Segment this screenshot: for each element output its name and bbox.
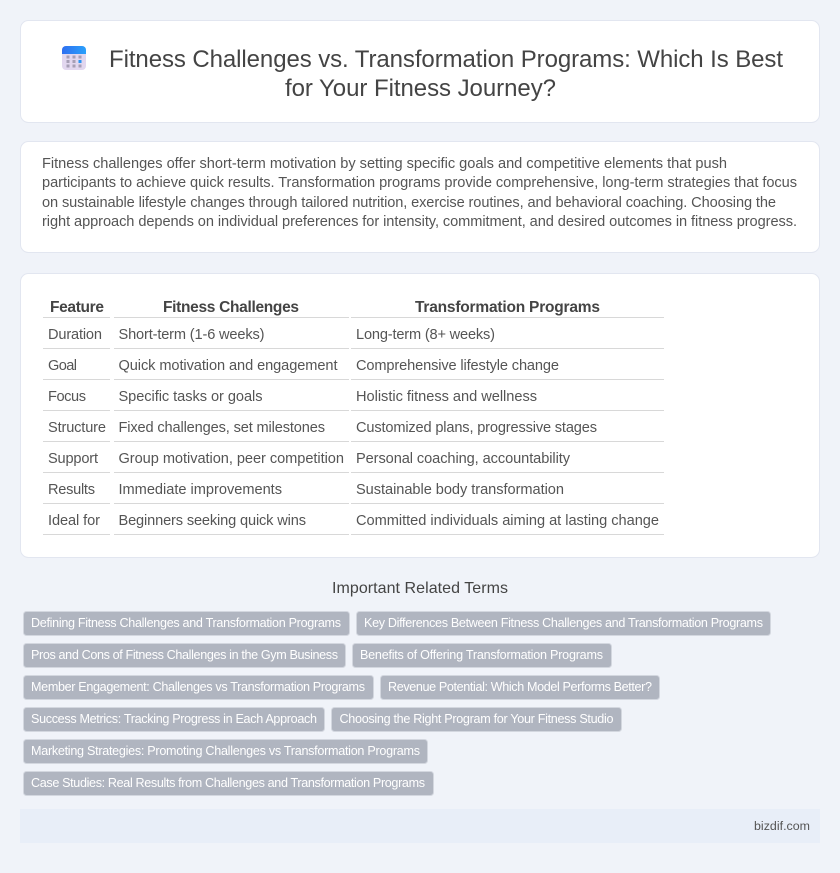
footer — [20, 809, 820, 843]
row: ideal for: Ideal for — [48, 513, 100, 529]
tag: pros and cons — [24, 644, 346, 668]
panel: comparison table — [20, 274, 820, 558]
tag: marketing strategies — [24, 740, 428, 764]
row: ideal for — [48, 513, 659, 529]
row: support: Group motivation, peer competition — [118, 451, 344, 467]
tag: benefits — [352, 644, 612, 668]
row: support — [48, 451, 571, 467]
row: focus: Holistic fitness and wellness — [356, 389, 537, 405]
row: results: Immediate improvements — [118, 482, 282, 498]
title: Fitness Challenges vs. Transformation Programs: Which Is Best — [109, 46, 783, 73]
panel: intro text — [20, 142, 820, 252]
tag: defining — [24, 612, 350, 636]
row: duration: Short-term (1-6 weeks) — [118, 327, 264, 343]
tag: key differences — [356, 612, 770, 636]
row: structure: Fixed challenges, set milestones — [118, 420, 325, 436]
row: focus: Specific tasks or goals — [118, 389, 262, 405]
row: results: Results — [48, 482, 95, 498]
tag: revenue potential — [380, 676, 660, 700]
text block: summary: Fitness challenges offer short-term motivation by setting specific goals and competitive elements that push — [42, 156, 727, 172]
tag: marketing strategies: Marketing Strategies: Promoting Challenges vs Transformation Programs — [31, 744, 420, 758]
title — [109, 46, 783, 102]
row: results — [48, 482, 564, 498]
tag: pros and cons: Pros and Cons of Fitness Challenges in the Gym Business — [31, 648, 338, 662]
tag: success metrics: Success Metrics: Tracking Progress in Each Approach — [31, 712, 317, 726]
row: goal: Comprehensive lifestyle change — [356, 358, 559, 374]
heading: related terms: Important Related Terms — [332, 580, 508, 597]
row: support: Support — [48, 451, 98, 467]
table header: Fitness Challenges — [163, 299, 299, 316]
row: goal — [48, 358, 559, 374]
tag: choosing the right program: Choosing the Right Program for Your Fitness Studio — [340, 712, 614, 726]
row: focus — [48, 389, 537, 405]
tag: key differences: Key Differences Between Fitness Challenges and Transformation Programs — [364, 616, 763, 630]
row: ideal for: Committed individuals aiming at lasting change — [356, 513, 659, 529]
title: for Your Fitness Journey? — [285, 75, 556, 102]
text block: summary: participants to achieve quick results. Transformation programs provide comprehensive, long-term strategies that focus — [42, 175, 797, 191]
row: structure: Customized plans, progressive stages — [356, 420, 597, 436]
table header — [50, 299, 600, 316]
table rule lines — [43, 317, 664, 535]
tag: defining: Defining Fitness Challenges and Transformation Programs — [31, 616, 341, 630]
tag: case studies — [24, 772, 434, 796]
row: structure — [48, 420, 597, 436]
table header: Feature — [50, 299, 104, 316]
row: duration: Duration — [48, 327, 102, 343]
row: focus: Focus — [48, 389, 86, 405]
tag: case studies: Case Studies: Real Results from Challenges and Transformation Programs — [31, 776, 425, 790]
row: structure: Structure — [48, 420, 106, 436]
row: duration: Long-term (8+ weeks) — [356, 327, 495, 343]
text block: summary — [42, 156, 797, 230]
tag: member engagement — [24, 676, 374, 700]
tag: member engagement: Member Engagement: Challenges vs Transformation Programs — [31, 680, 365, 694]
footer: bizdif.com — [754, 819, 810, 833]
tag: success metrics — [24, 708, 324, 732]
row: goal: Goal — [48, 358, 77, 374]
text block: summary: right approach depends on individual preferences for intensity, commitment, and desired outcomes in fitness progress. — [42, 214, 797, 230]
table header: Transformation Programs — [415, 299, 600, 316]
row: duration — [48, 327, 495, 343]
tag: revenue potential: Revenue Potential: Which Model Performs Better? — [388, 680, 652, 694]
tag: benefits: Benefits of Offering Transformation Programs — [360, 648, 603, 662]
row: goal: Quick motivation and engagement — [118, 358, 338, 374]
tag: choosing the right program — [332, 708, 622, 732]
panel: header — [20, 20, 820, 122]
icon: calendar — [62, 46, 86, 70]
text block: summary: on sustainable lifestyle changes through tailored nutrition, exercise routines, and behavioral coaching. Choosing the — [42, 195, 776, 211]
row: results: Sustainable body transformation — [356, 482, 564, 498]
row: support: Personal coaching, accountability — [356, 451, 571, 467]
panel: related term tags — [24, 612, 770, 796]
row: ideal for: Beginners seeking quick wins — [118, 513, 306, 529]
